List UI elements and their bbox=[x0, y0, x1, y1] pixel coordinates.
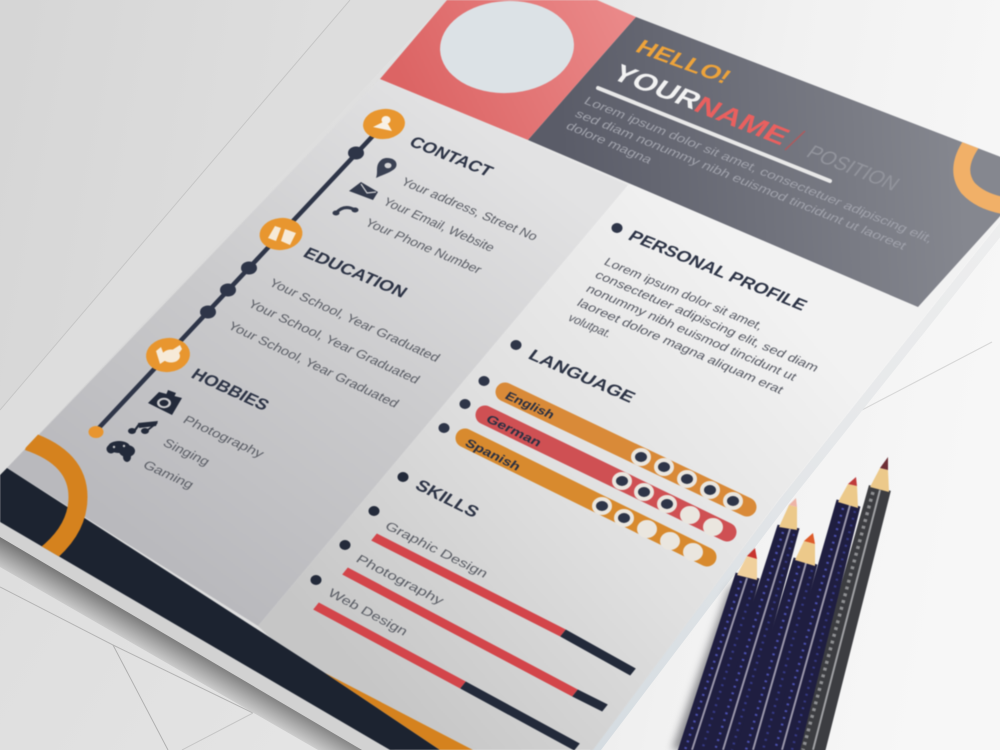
section: personal profile: PERSONAL PROFILE bbox=[625, 227, 811, 314]
contact details: Your address, Street No bbox=[398, 175, 541, 243]
hobby labels: Singing bbox=[160, 436, 213, 468]
bottom orange wedge bbox=[325, 673, 473, 750]
decorative orange ring bottom left bbox=[0, 441, 440, 750]
section: skills bbox=[310, 472, 636, 750]
language: english: English bbox=[502, 389, 558, 421]
pencil: dark grey bbox=[796, 457, 889, 750]
hobby labels: Gaming bbox=[140, 458, 197, 491]
skill: web design: Web Design bbox=[325, 586, 411, 638]
language: german: German bbox=[483, 412, 545, 449]
header intro text: dolore magna bbox=[563, 119, 656, 166]
header intro text: Lorem ipsum dolor sit amet, consectetuer adipiscing elit, bbox=[581, 94, 937, 245]
paper edge bbox=[0, 518, 395, 750]
icon: book badge bbox=[258, 216, 304, 252]
hobby labels bbox=[140, 413, 267, 491]
section: education: Your School, Year Graduated bbox=[245, 297, 423, 386]
skill: photography bbox=[340, 540, 608, 712]
heading: position: POSITION bbox=[802, 141, 905, 195]
paper shadow bbox=[0, 535, 367, 750]
skill: web design bbox=[310, 575, 580, 750]
section: hobbies: HOBBIES bbox=[188, 365, 273, 414]
icon: person badge bbox=[362, 107, 406, 141]
profile paragraph: Lorem ipsum dolor sit amet, bbox=[601, 255, 767, 333]
language: spanish bbox=[438, 423, 707, 561]
section: hobbies bbox=[106, 365, 273, 491]
pencil: navy with pink tip bbox=[708, 498, 797, 750]
pencil: navy with red tip bbox=[767, 477, 858, 750]
section: contact: CONTACT bbox=[406, 133, 497, 180]
section: language: LANGUAGE bbox=[525, 346, 639, 406]
icon: phone bbox=[332, 208, 358, 216]
icon: thumb badge bbox=[144, 336, 192, 374]
profile paragraph: consectetuer adipiscing elit, sed diam bbox=[592, 268, 822, 374]
icon: game controller bbox=[106, 441, 135, 462]
section: language bbox=[438, 340, 747, 561]
timeline bbox=[88, 124, 384, 438]
section: education: EDUCATION bbox=[300, 244, 411, 301]
icon: location pin bbox=[376, 158, 397, 178]
slash divider bbox=[785, 131, 805, 150]
icon: envelope bbox=[349, 182, 378, 200]
language: german bbox=[460, 399, 727, 536]
section: education: Your School, Year Graduated bbox=[266, 276, 443, 364]
hobby labels: Photography bbox=[180, 413, 267, 460]
contact details: Your Phone Number bbox=[362, 216, 485, 276]
profile paragraph bbox=[565, 255, 822, 396]
section: education bbox=[225, 244, 443, 410]
panel: header red block bbox=[380, 0, 636, 140]
heading: hello: HELLO! bbox=[631, 35, 736, 88]
section: skills: SKILLS bbox=[412, 476, 483, 521]
header intro text: sed diam nonummy nibh euismod tincidunt ut laoreet bbox=[572, 107, 910, 252]
section: contact bbox=[332, 133, 541, 276]
section: education: Your School, Year Graduated bbox=[225, 319, 402, 410]
pencil: navy front bbox=[680, 548, 757, 750]
panel: left column bbox=[7, 79, 628, 626]
profile paragraph: laoreet dolore magna aliquam erat bbox=[574, 296, 787, 396]
pencil group bbox=[672, 457, 889, 750]
language: spanish: Spanish bbox=[462, 436, 524, 473]
heading: name: NAME bbox=[689, 91, 796, 150]
icon: music note bbox=[128, 421, 158, 434]
section: personal profile bbox=[565, 223, 822, 396]
skill: photography: Photography bbox=[353, 552, 447, 607]
panel: right column bbox=[258, 150, 1000, 750]
pencil: navy with orange tip bbox=[738, 533, 815, 750]
decorative orange ring top right bbox=[962, 140, 1000, 206]
skill: graphic design bbox=[368, 506, 636, 676]
profile paragraph: volutpat. bbox=[565, 311, 615, 340]
contact details bbox=[362, 175, 541, 276]
name underline bbox=[598, 88, 830, 181]
icon: camera bbox=[148, 390, 182, 415]
contact details: Your Email, Website bbox=[380, 195, 498, 254]
language: english bbox=[478, 376, 747, 510]
skill: graphic design: Graphic Design bbox=[382, 519, 491, 580]
paper right edge bbox=[590, 172, 1000, 750]
photo placeholder circle bbox=[438, 0, 576, 96]
panel: header dark block bbox=[528, 17, 1000, 307]
pencil shadow bbox=[672, 575, 760, 750]
profile paragraph: nonummy nibh euismod tincidunt ut bbox=[583, 282, 800, 383]
heading: your: YOUR bbox=[607, 59, 708, 114]
